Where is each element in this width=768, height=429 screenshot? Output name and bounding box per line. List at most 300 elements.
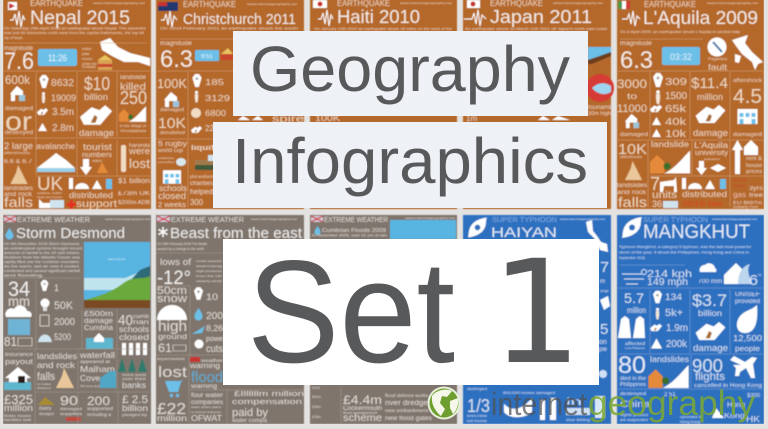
L'Aquila category: EARTHQUAKE — [644, 0, 696, 9]
L'Aquila units: units — [652, 190, 677, 201]
Nepal tourism: visited — [92, 159, 102, 163]
Desmond schools: 40 — [118, 312, 133, 329]
Desmond intro: Moisture from the Atlantic Ocean was — [4, 256, 80, 260]
Beast intro: On 25th February 2018 The Beast — [157, 242, 207, 246]
Beast snow — [157, 285, 187, 355]
Nepal intro: On Saturday 25th April 2015 an earthquake struck Nepal. The epicentre — [4, 26, 146, 30]
Haiyan bottom strip: in — [566, 397, 582, 408]
Desmond schools: schools — [119, 325, 149, 334]
L'Aquila funding: electric — [733, 184, 746, 188]
icon: seismic wave — [464, 10, 486, 26]
Mangkhut wind — [622, 269, 692, 288]
Beast water companies: companies — [191, 399, 224, 406]
Nepal intro: city of Nepal. — [4, 36, 23, 40]
Desmond insurance: payout — [5, 359, 33, 366]
Desmond rainfall — [4, 278, 32, 349]
Desmond impacts — [38, 280, 75, 342]
Mangkhut affected: million — [627, 306, 646, 315]
Mangkhut category: SUPER TYPHOON — [643, 217, 708, 224]
L'Aquila rules — [618, 39, 763, 207]
Christchurch liquifaction: liquifac — [191, 145, 225, 152]
L'Aquila landslide — [650, 140, 690, 173]
panel: Haiti 2010 — [310, 0, 457, 209]
Christchurch liquifaction: 300 — [190, 198, 204, 207]
map: Philippines — [586, 220, 610, 310]
L'Aquila university: L'Aquila — [694, 141, 729, 150]
icon: Christchurch clock: 9:51 — [201, 54, 213, 60]
panel: Storm Desmond — [3, 215, 151, 424]
Beast rules — [157, 253, 304, 423]
Nepal plate note: Indian — [82, 47, 92, 51]
fault label: fault — [708, 63, 728, 72]
Cumbrian scheme — [343, 393, 382, 424]
Christchurch intro: On 22nd February 2011 an earthquake struck the south — [160, 26, 298, 30]
Nepal landslide — [119, 75, 147, 133]
logo: internet geography — [428, 384, 755, 423]
Haiyan bottom strip: door fishing — [566, 418, 590, 422]
Nepal UK aid: soldiers, sniffer — [37, 191, 62, 195]
title box: Set 1: Set — [247, 230, 455, 393]
Haiyan storm surge fragment: m — [600, 279, 605, 285]
Beast impacts — [192, 287, 224, 355]
Nepal funding: $200m ADB — [118, 200, 151, 206]
Beast title: Beast from the east — [170, 225, 303, 242]
Nepal harvest: lost — [129, 156, 150, 171]
Christchurch casualties: 185 — [205, 78, 225, 87]
Christchurch casualties: 22 — [205, 124, 214, 133]
L'Aquila university — [694, 141, 729, 175]
L'Aquila support — [682, 178, 727, 208]
Nepal casualties — [5, 73, 76, 136]
Haiyan bottom strip: 800,000 homes damaged — [503, 391, 555, 395]
Cumbrian category: EXTREME WEATHER — [324, 217, 388, 224]
Christchurch liquifaction: charities — [190, 181, 213, 187]
Desmond rainfall: 34 — [8, 278, 30, 301]
Mangkhut flights: 900 — [692, 356, 723, 376]
Christchurch schools: cancelled — [158, 160, 174, 164]
Mangkhut landslides — [618, 352, 689, 388]
Beast snow: ground — [158, 334, 187, 341]
L'Aquila casualties: 309 — [665, 77, 688, 88]
Nepal support — [67, 178, 117, 210]
Mangkhut bottom strip: flights paused — [620, 413, 648, 417]
Desmond bottom stats: including a — [87, 412, 112, 417]
Cumbrian scheme: scheme — [343, 413, 382, 424]
Haiti intro: On January 12th 2010 an earthquake struck 16 miles on the west of the — [314, 27, 452, 31]
Haiyan affected fragment — [599, 321, 608, 353]
L'Aquila damage: damage — [693, 128, 728, 138]
L'Aquila funding: cut off — [733, 178, 746, 182]
Desmond damage: damage — [84, 318, 113, 325]
L'Aquila casualties: 40k — [665, 117, 687, 128]
Haiyan website: www.internetgeography.net — [560, 217, 605, 221]
Beast temperature: from the UK — [196, 274, 222, 278]
icon: typhoon — [622, 217, 642, 238]
Japan title: Japan 2011 — [490, 7, 592, 27]
L'Aquila casualties: 1500 — [665, 91, 687, 102]
Desmond schools — [118, 312, 149, 355]
Desmond insurance: insurance — [5, 352, 33, 358]
Christchurch casualties — [157, 74, 231, 135]
Nepal rules — [4, 43, 150, 176]
Nepal plate note: Eurasian — [82, 65, 96, 69]
Beast impacts: 8,26 — [206, 324, 224, 333]
Nepal landslide: Ghodatabela — [120, 129, 146, 133]
Desmond damage: Cumbria — [84, 325, 113, 332]
Cumbrian scheme: flood management — [343, 411, 377, 415]
icon: seismic wave — [622, 11, 640, 26]
fault label: Paganica — [708, 57, 727, 61]
Christchurch schools — [158, 141, 188, 209]
Mangkhut casualties — [650, 291, 688, 350]
L'Aquila casualties — [650, 73, 688, 140]
Beast compensation: £Illllllm million — [234, 391, 304, 398]
Mangkhut landslides: died in the — [620, 376, 646, 382]
Haiyan category: SUPER TYPHOON — [492, 217, 557, 224]
Desmond category: EXTREME WEATHER — [17, 215, 91, 224]
panel: L'Aquila 2009 — [617, 0, 764, 210]
L'Aquila funding: free — [749, 193, 764, 199]
icon: seismic wave — [161, 11, 177, 27]
icon: UK flag — [4, 216, 16, 222]
Beast flood warning — [189, 357, 224, 390]
L'Aquila rent — [732, 140, 763, 175]
icon: Japan tsunami circle — [586, 74, 614, 102]
Mangkhut damage — [692, 291, 728, 353]
Cumbrian scheme: Cockermouth — [343, 406, 382, 412]
Desmond rainfall: 81 — [4, 334, 17, 349]
L'Aquila falls: and rock — [617, 190, 647, 196]
logo wordmark: geography — [588, 384, 755, 423]
L'Aquila magnitude: magnitude — [620, 41, 653, 47]
panel: Beast from the east — [156, 215, 304, 424]
Desmond landslides: falls — [37, 371, 55, 383]
Desmond damage — [84, 309, 113, 349]
Beast water companies: OFWAT — [191, 414, 222, 423]
Cumbrian costs list: £34m — [312, 405, 321, 409]
Mangkhut casualties: 200k — [666, 339, 688, 350]
Nepal funding: £73m UK — [118, 191, 150, 197]
Mangkhut affected: in the Philippines — [625, 346, 645, 350]
icon: snowflake — [158, 227, 168, 237]
Nepal UK aid: dogs and rescue — [37, 195, 62, 199]
Cumbrian measures: new flood gates — [385, 416, 432, 422]
Christchurch casualties: 3129 — [205, 94, 231, 103]
Mangkhut damage: $3.7 — [692, 291, 727, 310]
logo wordmark: internet — [491, 386, 587, 422]
Christchurch liquifaction: helped — [190, 189, 213, 196]
Nepal damage: $10 — [84, 74, 110, 94]
L'Aquila units — [650, 174, 678, 209]
Beast flood warning: warning — [190, 384, 217, 390]
Desmond intro: On 5th December 2015 Storm Desmond, — [4, 242, 80, 246]
Desmond landslides: in Lake — [37, 382, 51, 386]
Nepal plate note: under the — [82, 62, 97, 66]
Nepal damage: billion — [84, 92, 108, 102]
Haiti fragment: 100K — [315, 114, 341, 123]
L'Aquila rent: house — [746, 163, 762, 169]
Cumbrian costs list: £91m — [312, 395, 321, 399]
Mangkhut bottom strip: 2 51 — [664, 392, 676, 398]
Beast temperature — [157, 257, 223, 289]
icon: fault compass — [708, 38, 726, 56]
Beast temperature: easterly winds — [196, 279, 223, 283]
Mangkhut flights: flights — [695, 371, 726, 383]
Mangkhut surge — [724, 263, 762, 289]
title box: Geography: Geography — [250, 33, 570, 105]
Beast flood warning: flood — [191, 369, 223, 386]
L'Aquila funding: 3yrs — [749, 186, 763, 192]
Desmond waterfall: Malham — [80, 364, 115, 374]
Cumbrian rules — [340, 386, 342, 423]
Beast water companies: four water — [191, 392, 224, 399]
L'Aquila units: 36 — [652, 199, 662, 209]
Desmond bottom stats: pledged by — [122, 413, 147, 417]
L'Aquila casualties: 10k — [665, 129, 687, 140]
Christchurch schools: closed — [158, 191, 186, 201]
Nepal UK aid: UK — [37, 174, 63, 194]
Christchurch casualties: demolished — [160, 130, 186, 135]
Mangkhut title: MANGKHUT — [643, 222, 750, 243]
Mangkhut intro: storm of the year. It struck the Philippines, Hong Kong and China in — [619, 250, 749, 254]
Beast impacts: 10 — [206, 292, 218, 302]
Beast snow: snow — [157, 293, 187, 305]
Nepal landslide: landslide — [120, 75, 147, 81]
map: Nepal — [100, 38, 150, 66]
Cumbrian measures: new embankment — [385, 408, 429, 413]
Christchurch schools: schools — [159, 184, 187, 193]
Haiyan storm surge fragment: 7 — [600, 259, 609, 276]
Desmond waterfall: appeared at — [80, 359, 111, 364]
Desmond river banks: over their — [122, 377, 147, 381]
L'Aquila casualties: 65k — [665, 104, 687, 115]
L'Aquila damage: $11.4 — [691, 75, 728, 92]
Desmond landslides: and rock — [37, 360, 76, 370]
Haiti website: www.internetgeography.net — [400, 1, 452, 5]
Desmond river banks: rivers burst — [122, 373, 146, 377]
Cumbrian scheme: £4.4m — [343, 393, 382, 407]
Nepal casualties: 600k — [5, 73, 31, 87]
Beast water companies: water action plans — [191, 405, 222, 409]
Desmond waterfall: Tall steep drop — [80, 384, 100, 388]
L'Aquila landslide: landslide — [651, 140, 690, 149]
Mangkhut landslides: 80 — [618, 352, 646, 379]
Haiyan bottom strip — [467, 370, 607, 423]
Mangkhut affected — [618, 290, 646, 350]
Beast water companies — [191, 392, 224, 423]
diagram: relief rainfall — [84, 242, 150, 308]
Nepal harvest: harvests — [129, 143, 151, 149]
Desmond insurance — [4, 352, 33, 422]
Nepal casualties: 3.5m — [52, 107, 74, 118]
Mangkhut bottom strip: Kong — [724, 413, 745, 420]
Desmond intro: condensed and caused significant rainfall — [4, 269, 80, 273]
icon: globe — [428, 386, 460, 420]
Mangkhut surge: m — [758, 272, 762, 277]
Nepal funding: $1 billion — [118, 178, 150, 185]
Nepal harvest: were — [128, 146, 150, 156]
Christchurch website: www.internetgeography.net — [247, 2, 297, 6]
Mangkhut intro: September 2018. — [619, 256, 646, 260]
Beast compensation: water compa — [232, 418, 267, 424]
icon: L'Aquila clock — [662, 47, 700, 65]
fault label — [708, 57, 728, 72]
Nepal casualties: or — [5, 106, 32, 136]
Mangkhut affected: affected — [625, 341, 646, 346]
Cumbrian intro: In November 2009, over 31 cm of rain — [312, 234, 387, 238]
Mangkhut bottom strip: Hong — [727, 402, 745, 409]
Desmond bottom stats: £ 2.5 — [122, 394, 148, 406]
icon: seismic wave — [318, 10, 333, 26]
icon: L'Aquila clock: 03:32 — [670, 52, 692, 62]
Beast website: www.internetgeography.net — [251, 217, 297, 221]
Desmond schools: cumb — [133, 314, 149, 320]
Mangkhut rainfall — [698, 263, 722, 285]
L'Aquila aftershock — [733, 78, 763, 138]
L'Aquila falls: aftershocks — [620, 155, 642, 159]
Nepal aftershocks and falls: falls — [4, 194, 33, 210]
Mangkhut landslides: landslides — [650, 355, 689, 364]
Japan intro: An earthquake struck on March 11th 2011 off Japan's north east coast — [465, 27, 607, 31]
Mangkhut casualties: 5k+ — [665, 308, 683, 319]
icon: Italy flag — [618, 1, 630, 9]
Cumbrian costs list — [312, 386, 321, 419]
Mangkhut flights — [692, 356, 762, 389]
Desmond intro: and flooding. — [4, 274, 44, 278]
panel: Super Typhoon Mangkhut — [617, 215, 764, 424]
Cumbrian website: www.internetgeography.net — [405, 216, 455, 220]
Desmond schools: closed — [119, 333, 149, 342]
title box: Infographics: Infographics — [232, 125, 588, 197]
Beast compensation: paid by — [232, 407, 268, 419]
Nepal aftershocks and falls: 6.6 & 6.7 — [4, 159, 33, 165]
Mangkhut bottom strip — [620, 391, 761, 424]
Beast water companies: to improve response — [191, 410, 221, 414]
icon: Nepal flag — [8, 2, 17, 10]
Christchurch liquifaction: plot workers — [190, 174, 214, 179]
Beast temperature: -12° — [157, 268, 191, 289]
L'Aquila magnitude: 6.3 — [620, 47, 653, 74]
Beast supermarkets: lost — [158, 364, 188, 381]
Desmond waterfall — [79, 351, 116, 388]
Desmond bottom stats: damaged — [60, 407, 82, 411]
Mangkhut bottom strip: HK — [746, 415, 761, 424]
L'Aquila falls — [617, 141, 647, 210]
Desmond bottom stats: supplies — [60, 412, 82, 416]
Beast temperature: warming — [196, 264, 223, 268]
L'Aquila support: 2010 tax — [682, 201, 723, 208]
Haiyan affected fragment: on — [599, 339, 607, 346]
Cumbrian costs list: £124 — [312, 386, 320, 390]
Japan tsunami label: 30m high — [588, 111, 611, 117]
Haiyan storm surge fragment — [600, 259, 609, 293]
L'Aquila funding: gas — [733, 192, 747, 199]
icon: typhoon — [468, 218, 487, 237]
L'Aquila damage — [691, 75, 728, 138]
Beast impacts: cuts — [206, 344, 223, 355]
Nepal casualties: destroyed — [5, 130, 33, 136]
Beast flood warning: weather — [201, 358, 224, 363]
Haiyan bottom strip: destroyed — [467, 386, 487, 391]
Desmond insurance: families lost — [4, 418, 31, 422]
Nepal magnitude: magnitude — [4, 46, 34, 52]
Mangkhut bottom strip: uprooted in — [680, 415, 702, 419]
Desmond intro: rapidly lifted over the Cumbrian mountains. — [4, 260, 80, 264]
icon: UK flag — [311, 216, 323, 222]
Desmond bottom stats: rivers — [39, 406, 52, 412]
Beast flood warning: warning — [189, 363, 220, 370]
icon: flag — [313, 0, 327, 8]
Nepal casualties: damaged — [5, 106, 33, 112]
icon: tectonic block — [588, 47, 611, 64]
Cumbrian costs list: £15m — [312, 415, 321, 419]
Mangkhut wind: 149 mph — [647, 277, 688, 288]
Nepal funding — [118, 178, 151, 206]
Nepal damage — [79, 74, 114, 138]
Christchurch schools: world cup — [158, 148, 183, 154]
Nepal aftershocks and falls: 2 large — [4, 141, 33, 151]
Mangkhut damage: billion — [698, 309, 722, 318]
Desmond damage: £500m — [84, 309, 113, 318]
Mangkhut UNICEF: people — [735, 346, 760, 353]
Christchurch casualties: 10K — [158, 115, 186, 132]
Christchurch magnitude: 6.3 — [160, 46, 193, 73]
Beast supermarkets: supermarkets — [157, 357, 185, 361]
Desmond bottom stats: 90 — [60, 393, 78, 408]
Christchurch magnitude: magnitude — [160, 41, 193, 47]
icon: water drop — [6, 228, 14, 240]
Beast temperature: high pressure — [196, 269, 222, 273]
diagram: relief rainfall: warm wet air — [108, 257, 125, 261]
icon: water drop — [314, 226, 320, 235]
Nepal tourism: tourist — [83, 142, 113, 152]
Christchurch casualties: 6800 — [205, 109, 227, 118]
Beast impacts: 200 — [206, 311, 223, 322]
Japan tsunami label: tsunami — [588, 104, 611, 111]
Nepal support: support — [76, 199, 117, 210]
Beast impacts: powe — [206, 336, 223, 343]
Japan fragment — [466, 114, 570, 123]
Mangkhut bottom strip: destroyed — [620, 391, 647, 396]
Cumbrian measures — [385, 393, 432, 422]
L'Aquila rent: prices — [746, 169, 763, 175]
Mangkhut bottom strip: Hong Kong — [680, 420, 700, 424]
Nepal landslide: killed — [120, 82, 146, 93]
Mangkhut casualties: 1.9m — [666, 323, 688, 334]
L'Aquila houses damaged: damaged — [620, 132, 648, 138]
Christchurch category: EARTHQUAKE — [183, 0, 236, 9]
icon: Christchurch clock — [195, 50, 219, 61]
Beast snow: 61 — [158, 341, 172, 355]
Nepal harvest — [121, 143, 151, 172]
Mangkhut UNICEF — [733, 292, 763, 353]
Desmond insurance: million — [4, 403, 33, 413]
Nepal UK aid — [37, 174, 64, 208]
Haiyan storm surge fragment: surge — [600, 289, 609, 293]
Christchurch casualties: 100K — [157, 76, 187, 91]
panel: Christchurch 2011 — [156, 0, 305, 209]
Mangkhut landslides: Philippines — [620, 382, 647, 388]
Nepal magnitude: 7.6 — [4, 48, 34, 75]
Mangkhut bottom strip: China — [620, 399, 650, 409]
Beast intro: caused by a change to the north — [157, 247, 204, 251]
Christchurch spire fragment — [238, 114, 305, 125]
Desmond bottom stats — [38, 393, 148, 421]
Desmond rules — [4, 278, 150, 423]
Christchurch spire fragment: spire — [272, 114, 305, 125]
Nepal casualties: 19009 — [51, 93, 76, 103]
Beast category: EXTREME WEATHER — [171, 215, 245, 224]
